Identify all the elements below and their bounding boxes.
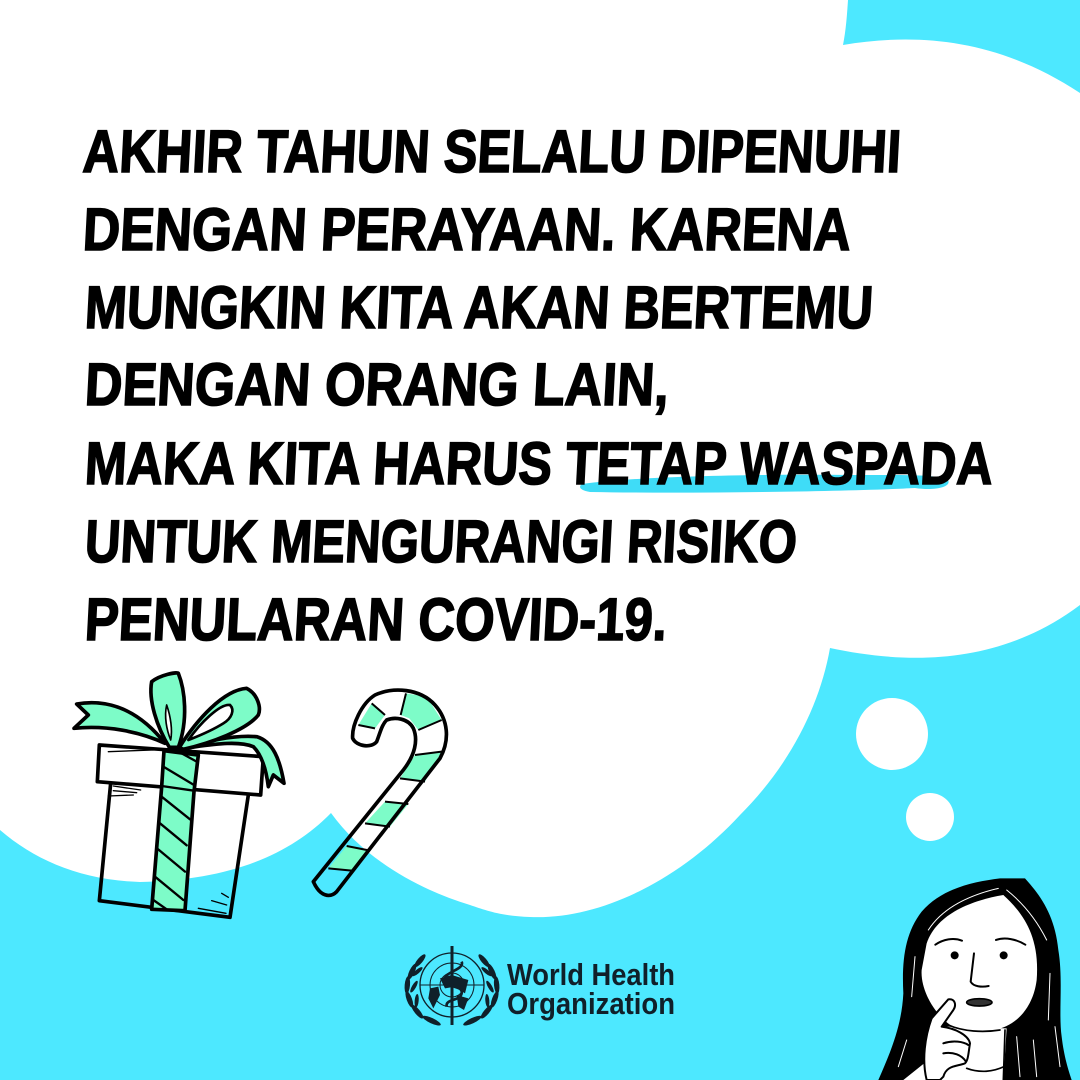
hair — [878, 878, 1072, 1080]
WHO emblem — [404, 946, 500, 1027]
logo: World Health Organization: Organization — [507, 986, 675, 1021]
gift vertical ribbon — [152, 751, 198, 911]
main text: AKHIR TAHUN SELALU DIPENUHI — [81, 118, 903, 185]
main text: MUNGKIN KITA AKAN BERTEMU — [83, 274, 875, 341]
face — [922, 895, 1037, 1030]
main text: DENGAN PERAYAAN. KARENA — [81, 196, 853, 263]
eyebrows — [935, 939, 1025, 945]
gift left ribbon tail — [74, 703, 165, 743]
thought bubble large — [856, 698, 928, 770]
gift loop slit — [166, 705, 171, 740]
gift ribbon stripes — [153, 753, 197, 909]
continents — [428, 975, 468, 1010]
main text: PENULARAN COVID-19. — [83, 586, 669, 653]
gift box body — [99, 783, 248, 917]
WHO wordmark: World Health — [507, 957, 675, 992]
laurel right — [462, 953, 500, 1027]
character: thinking woman — [878, 878, 1072, 1080]
cane band 4 — [401, 693, 442, 730]
thought bubble small — [906, 793, 954, 841]
gift loop hole — [188, 705, 232, 740]
hair highlights — [898, 888, 1060, 1077]
gift right ribbon tail — [183, 736, 284, 787]
hand — [924, 999, 970, 1080]
gift lid — [97, 745, 263, 795]
icon: gift box — [74, 673, 284, 917]
jaw line — [948, 1025, 1000, 1031]
gift right loop — [179, 688, 259, 749]
main text — [81, 118, 995, 653]
main text: DENGAN ORANG LAIN, — [83, 351, 671, 418]
staff and snake — [447, 946, 456, 1025]
gift shading lines — [108, 750, 228, 913]
underline highlight — [580, 475, 949, 493]
cane outline — [313, 690, 446, 895]
laurel left — [404, 953, 442, 1027]
main text: UNTUK MENGURANGI RISIKO — [83, 508, 799, 575]
cane band lines — [328, 693, 442, 871]
cane band 3 — [400, 752, 442, 782]
cane band 5 — [358, 703, 385, 728]
cane band 1 — [328, 846, 370, 871]
icon: candy cane — [313, 690, 446, 895]
gift top loop — [151, 673, 185, 747]
fingers — [943, 1042, 968, 1062]
nose — [971, 953, 989, 987]
cane band 2 — [365, 802, 408, 827]
eyes — [951, 951, 959, 959]
mouth — [967, 999, 992, 1006]
body and neck — [903, 1027, 1007, 1080]
logo: World Health Organization — [404, 946, 675, 1027]
globe — [420, 953, 484, 1017]
collar line — [967, 1030, 1005, 1080]
